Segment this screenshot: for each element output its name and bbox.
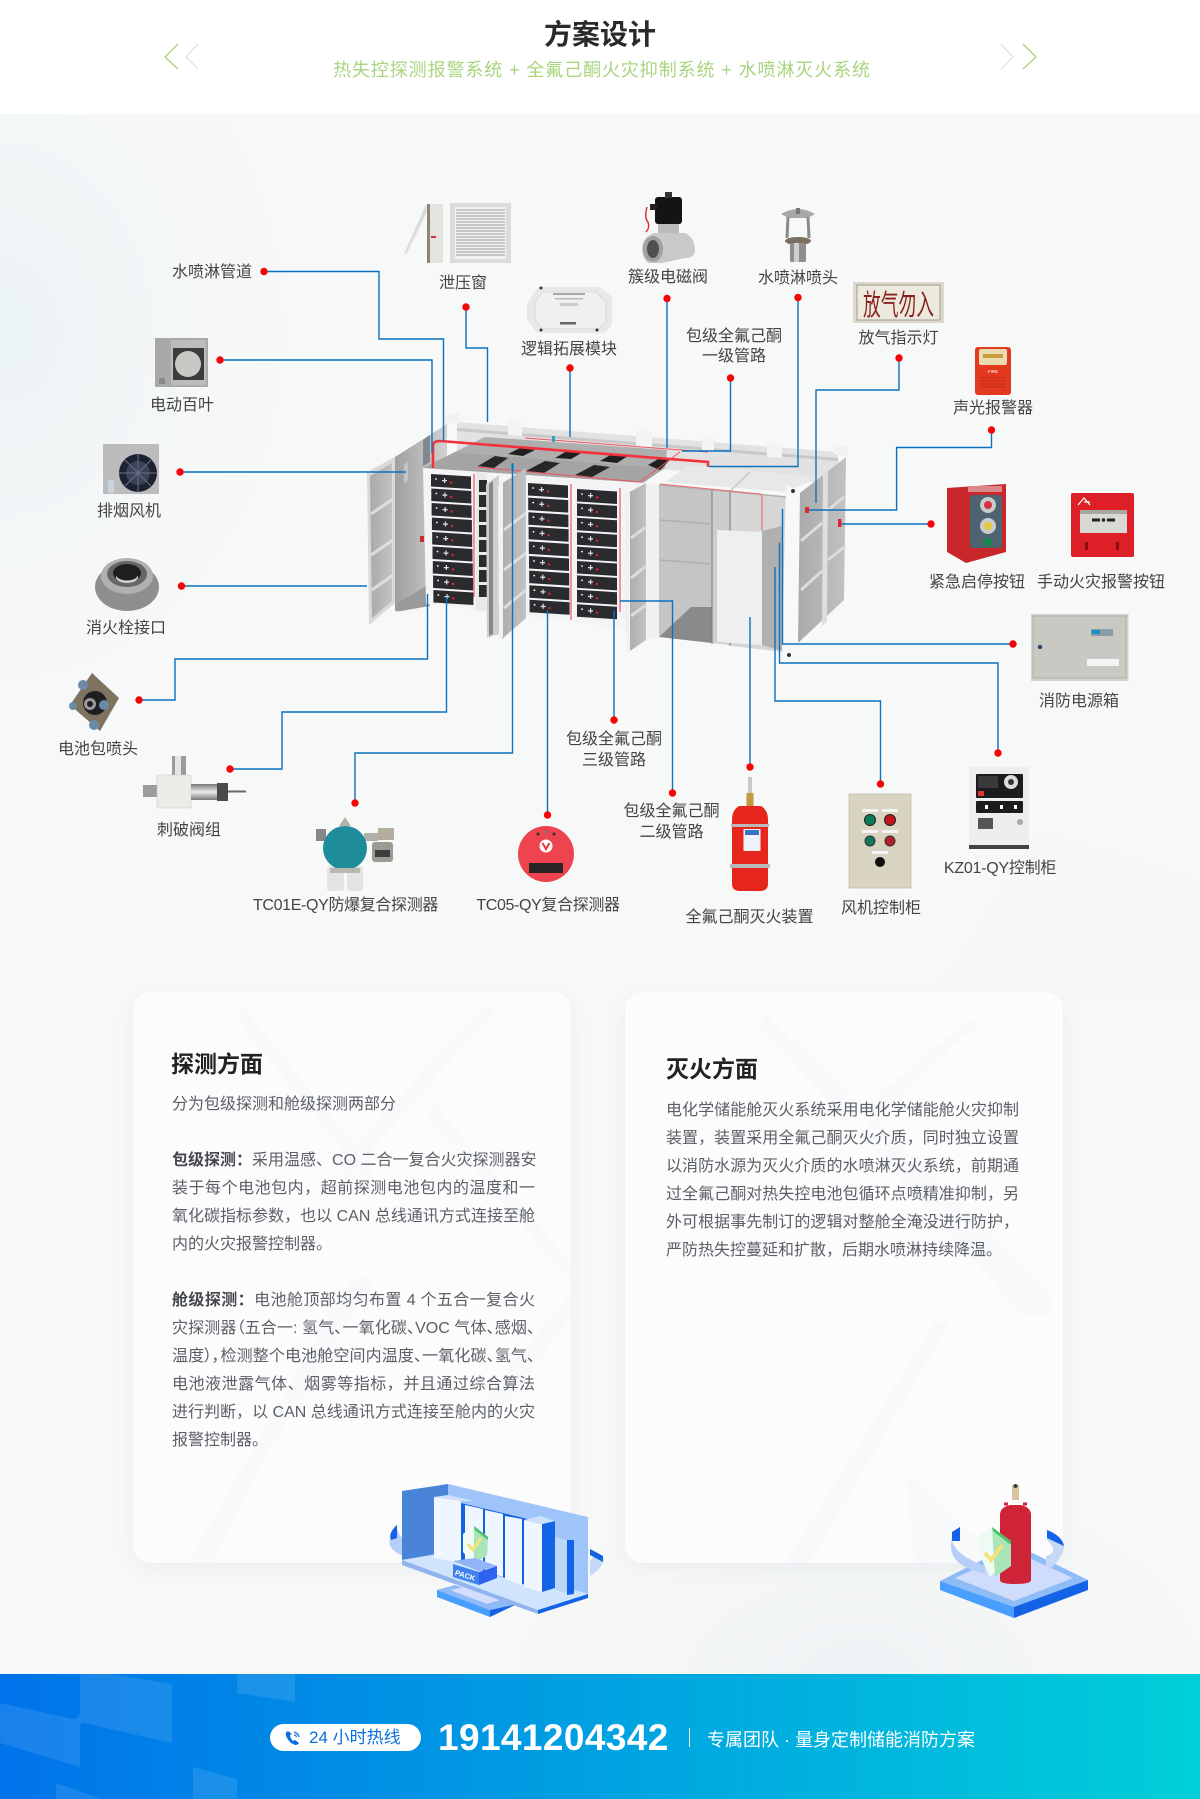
slogan: 专属团队 · 量身定制储能消防方案 [707, 1730, 975, 1750]
leader line [775, 567, 880, 784]
callout: 紧急启停按钮 [841, 484, 1025, 591]
text: cabin-level detection: 舱级探测：电池舱顶部均匀布置 4 个五合一复合火 [172, 1292, 535, 1309]
anchor dot [994, 749, 1002, 757]
panel: 探测方面 [133, 992, 571, 1563]
anchor dot [566, 364, 574, 372]
phone number: 19141204342 [438, 1717, 669, 1758]
label: 消防电源箱 [1039, 692, 1119, 710]
icon: controller cabinet [969, 767, 1029, 849]
leader line [613, 610, 615, 720]
footer banner [0, 1674, 1200, 1799]
footer background shapes [0, 1674, 295, 1799]
text: cabin-level detection: 报警控制器。 [172, 1432, 268, 1449]
label line 2: 三级管路 [582, 751, 646, 769]
icon: manual alarm button [1071, 493, 1134, 557]
label line 2: 一级管路 [702, 347, 766, 365]
anchor dot [216, 356, 224, 364]
anchor dot [663, 295, 671, 302]
label: 风机控制柜 [841, 899, 921, 917]
callout: 逻辑拓展模块 [521, 286, 617, 437]
anchor dot [927, 520, 935, 528]
icon: solenoid valve [642, 192, 695, 263]
divider [689, 1728, 690, 1747]
text: pack-level detection: 装于每个电池包内，超前探测电池包内的温度和一 [172, 1180, 535, 1197]
label: 包级全氟己酮 [566, 730, 662, 748]
icon: power box [1031, 614, 1128, 681]
callout: 簇级电磁阀 [628, 192, 708, 448]
icon: phone [286, 1731, 300, 1745]
callout: KZ01-QY控制柜 [780, 542, 1056, 877]
text: cabin-level detection [172, 1291, 535, 1449]
text: suppression description: 外可根据事先制订的逻辑对整舱全淹没进行防护， [666, 1214, 1019, 1231]
leader line [355, 463, 512, 803]
base [437, 1585, 517, 1617]
callout: 全氟己酮灭火装置 [685, 617, 814, 926]
icon: extinguishing cylinder [730, 777, 770, 891]
icon: logic module [527, 286, 612, 333]
leader line [569, 368, 571, 437]
leader line [816, 358, 899, 503]
callout: 刺破阀组 [143, 597, 446, 839]
anchor dot [462, 303, 470, 311]
text: pack-level detection: 内的火灾报警控制器。 [172, 1236, 332, 1253]
anchor dot [794, 294, 802, 301]
text: suppression description: 以消防水源为灭火介质的水喷淋灭火系统，前期通 [666, 1158, 1019, 1175]
label line 2: 二级管路 [639, 823, 704, 841]
leader line [780, 542, 998, 753]
heading: 灭火方面 [666, 1056, 758, 1082]
callout: 消火栓接口 [86, 558, 367, 637]
anchor dot [610, 716, 618, 724]
label: 包级全氟己酮 [686, 327, 782, 345]
illustration: extinguisher cylinder on platform [940, 1484, 1088, 1618]
panel: 灭火方面 [625, 992, 1063, 1563]
leader line [809, 430, 992, 510]
leader line [709, 298, 798, 466]
anchor dot [226, 765, 234, 773]
panel: system diagram [58, 192, 1165, 926]
label: 电池包喷头 [58, 740, 138, 758]
anchor dot [176, 468, 184, 476]
ring left [390, 1525, 417, 1560]
leader line [264, 272, 444, 441]
hotline label: 24 小时热线 [309, 1728, 401, 1747]
leader line [682, 378, 730, 451]
icon: relief window [404, 203, 511, 263]
text: suppression description [666, 1101, 1019, 1259]
ring right [590, 1549, 603, 1576]
leader line [180, 471, 406, 473]
anchor dot [178, 582, 185, 590]
label: 泄压窗 [439, 274, 487, 292]
icon: fan control cabinet [849, 794, 911, 888]
label: 逻辑拓展模块 [521, 340, 617, 358]
callout: 水喷淋管道 [172, 263, 444, 441]
callout: 包级全氟己酮二级管路 [620, 601, 720, 841]
icon: sound and light alarm [975, 347, 1011, 395]
decorative chevrons [164, 44, 1037, 70]
anchor dot [260, 268, 268, 275]
anchor dot [877, 780, 884, 788]
anchor dot [746, 763, 754, 771]
text: suppression description: 过全氟己酮对热失控电池包循环点喷精准抑制，另 [666, 1186, 1019, 1203]
text: cabin-level detection: 灾探测器（五合一: 氢气、一氧化碳、VOC 气体、感烟、 [172, 1320, 535, 1337]
anchor dot [544, 811, 551, 819]
leader line [230, 597, 446, 769]
label: 包级全氟己酮 [623, 802, 720, 820]
anchor dot [1009, 640, 1017, 648]
PACK box [453, 1558, 497, 1585]
ring [951, 1527, 1064, 1574]
text: cabin-level detection: 进行判断，以 CAN 总线通讯方式连接至舱内的火灾 [172, 1404, 535, 1421]
shield [463, 1526, 488, 1563]
anchor dot [351, 799, 359, 807]
leader line [749, 617, 751, 767]
leader line [666, 298, 668, 448]
hotline pill [270, 1724, 421, 1751]
callout: TC05-QY复合探测器 [476, 610, 620, 914]
label: 排烟风机 [97, 502, 161, 520]
icon: sound and light alarm: FIRE [988, 369, 998, 374]
label: 消火栓接口 [86, 619, 166, 637]
icon: emergency stop button [947, 484, 1006, 563]
leader line [182, 585, 367, 587]
callout: 包级全氟己酮三级管路 [566, 610, 662, 769]
heading: 探测方面 [171, 1051, 263, 1077]
card background pattern [133, 992, 571, 1563]
callout: 手动火灾报警按钮 [1037, 493, 1165, 591]
leader line [841, 523, 931, 525]
callout: 泄压窗 [404, 203, 511, 422]
text: pack-level detection [172, 1151, 536, 1253]
PACK box: PACK [454, 1568, 477, 1583]
text: cabin-level detection: 电池液泄露气体、烟雾等指标，并且通过综合算法 [172, 1376, 535, 1393]
leader line [782, 509, 1013, 644]
callout: 排烟风机 [97, 444, 406, 520]
label: TC01E-QY防爆复合探测器 [253, 895, 438, 914]
label: TC05-QY复合探测器 [476, 896, 620, 914]
icon: hydrant coupling [95, 558, 159, 611]
label: 全氟己酮灭火装置 [685, 908, 814, 926]
callout: 电动百叶 [150, 338, 432, 453]
label: 电动百叶 [150, 396, 214, 414]
text: suppression description: 电化学储能舱灭火系统采用电化学储能舱火灾抑制 [666, 1102, 1019, 1119]
leader line [546, 610, 548, 815]
callout: 风机控制柜 [775, 567, 921, 917]
label: 声光报警器 [953, 399, 1033, 417]
title: 方案设计 [544, 19, 656, 50]
icon: smoke exhaust fan [103, 444, 159, 494]
callout: 放气指示灯 [816, 282, 944, 503]
leader line [220, 360, 432, 453]
label: 水喷淋喷头 [758, 269, 838, 287]
label: 簇级电磁阀 [628, 268, 708, 286]
cabin shell [402, 1484, 588, 1614]
icon: do-not-enter sign [853, 282, 944, 323]
header [0, 0, 1200, 114]
label: 手动火灾报警按钮 [1037, 573, 1165, 591]
intro text: 分为包级探测和舱级探测两部分 [172, 1096, 396, 1113]
text: suppression description: 装置，装置采用全氟己酮灭火介质，同时独立设置 [666, 1130, 1019, 1147]
text: pack-level detection: 包级探测：采用温感、CO 二合一复合火灾探测器安 [172, 1152, 536, 1169]
anchor dot [669, 789, 676, 797]
icon: sprinkler head [781, 208, 815, 262]
label: 紧急启停按钮 [929, 573, 1025, 591]
label: 刺破阀组 [157, 821, 221, 839]
anchor dot [895, 354, 903, 362]
subtitle: 热失控探测报警系统 + 全氟己酮火灾抑制系统 + 水喷淋灭火系统 [333, 60, 871, 80]
leader line [620, 601, 672, 793]
cylinder [1000, 1484, 1031, 1584]
callout: 水喷淋喷头 [709, 208, 838, 466]
label: 水喷淋管道 [172, 263, 252, 281]
callout: 电池包喷头 [58, 594, 428, 758]
container illustration [367, 413, 848, 664]
callout: TC01E-QY防爆复合探测器 [253, 463, 512, 914]
label: 放气指示灯 [858, 329, 939, 347]
anchor dot [135, 696, 143, 704]
text: suppression description: 严防热失控蔓延和扩散，后期水喷淋持续降温。 [666, 1242, 1002, 1259]
text: pack-level detection: 氧化碳指标参数，也以 CAN 总线通讯方式连接至舱 [172, 1208, 535, 1225]
leader line [139, 594, 428, 700]
icon: explosion-proof detector [316, 817, 394, 891]
label: KZ01-QY控制柜 [944, 859, 1056, 877]
illustration: battery cabin isometric [390, 1484, 604, 1617]
icon: pack nozzle [69, 673, 119, 731]
leader line [466, 307, 488, 422]
text: cabin-level detection: 温度），检测整个电池舱空间内温度、一氧化碳、氢气、 [172, 1348, 535, 1365]
anchor dot [988, 426, 995, 434]
callout: 声光报警器 [809, 347, 1033, 510]
icon: do-not-enter sign: 放气勿入 [863, 289, 934, 322]
base platform [940, 1544, 1088, 1618]
anchor dot [727, 374, 734, 382]
icon: red detector [518, 826, 574, 882]
card background pattern [625, 992, 1063, 1563]
icon: puncture valve [143, 756, 246, 808]
shield [978, 1527, 1011, 1577]
callout: 消防电源箱 [782, 509, 1128, 710]
callout: 包级全氟己酮一级管路 [682, 327, 782, 451]
icon: electric louver [155, 338, 208, 387]
battery racks [434, 1495, 574, 1595]
